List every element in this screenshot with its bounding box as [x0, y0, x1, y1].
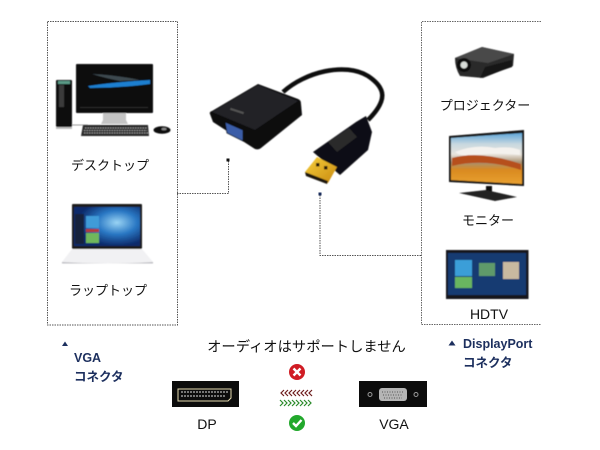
label: projector: プロジェクター [440, 98, 530, 113]
icon: check [289, 415, 305, 431]
connector line: VGA [177, 158, 230, 194]
icon: monitor [449, 130, 524, 201]
connector line: DisplayPort [318, 192, 422, 256]
icon: cross [289, 364, 305, 380]
callout: DisplayPort connector: DisplayPort [463, 337, 533, 351]
label: laptop: ラップトップ [69, 283, 147, 298]
label: desktop: デスクトップ [71, 158, 149, 173]
icon: desktop computer [56, 64, 170, 136]
adapter: VGA to DP cable [210, 69, 382, 184]
panel: output devices [422, 22, 541, 324]
callout: VGA connector: コネクタ [74, 370, 124, 384]
icon: HDTV [446, 250, 528, 299]
label: HDTV: HDTV [470, 306, 509, 322]
icon: DP port [172, 381, 239, 407]
label: monitor: モニター [462, 213, 514, 228]
callout: DisplayPort connector [448, 337, 533, 370]
icon: laptop [62, 204, 153, 264]
callout: VGA connector [62, 342, 124, 384]
callout: DisplayPort connector: コネクタ [463, 356, 513, 370]
arrows: supported direction [280, 400, 311, 406]
callout: VGA connector: VGA [74, 351, 101, 365]
icon: projector [455, 47, 514, 78]
note: audio not supported: オーディオはサポートしません [207, 338, 406, 356]
arrows: unsupported direction [281, 390, 312, 396]
label: VGA: VGA [379, 416, 409, 432]
panel: source devices [48, 22, 178, 325]
label: DP: DP [197, 416, 217, 432]
icon: VGA port [359, 381, 427, 407]
